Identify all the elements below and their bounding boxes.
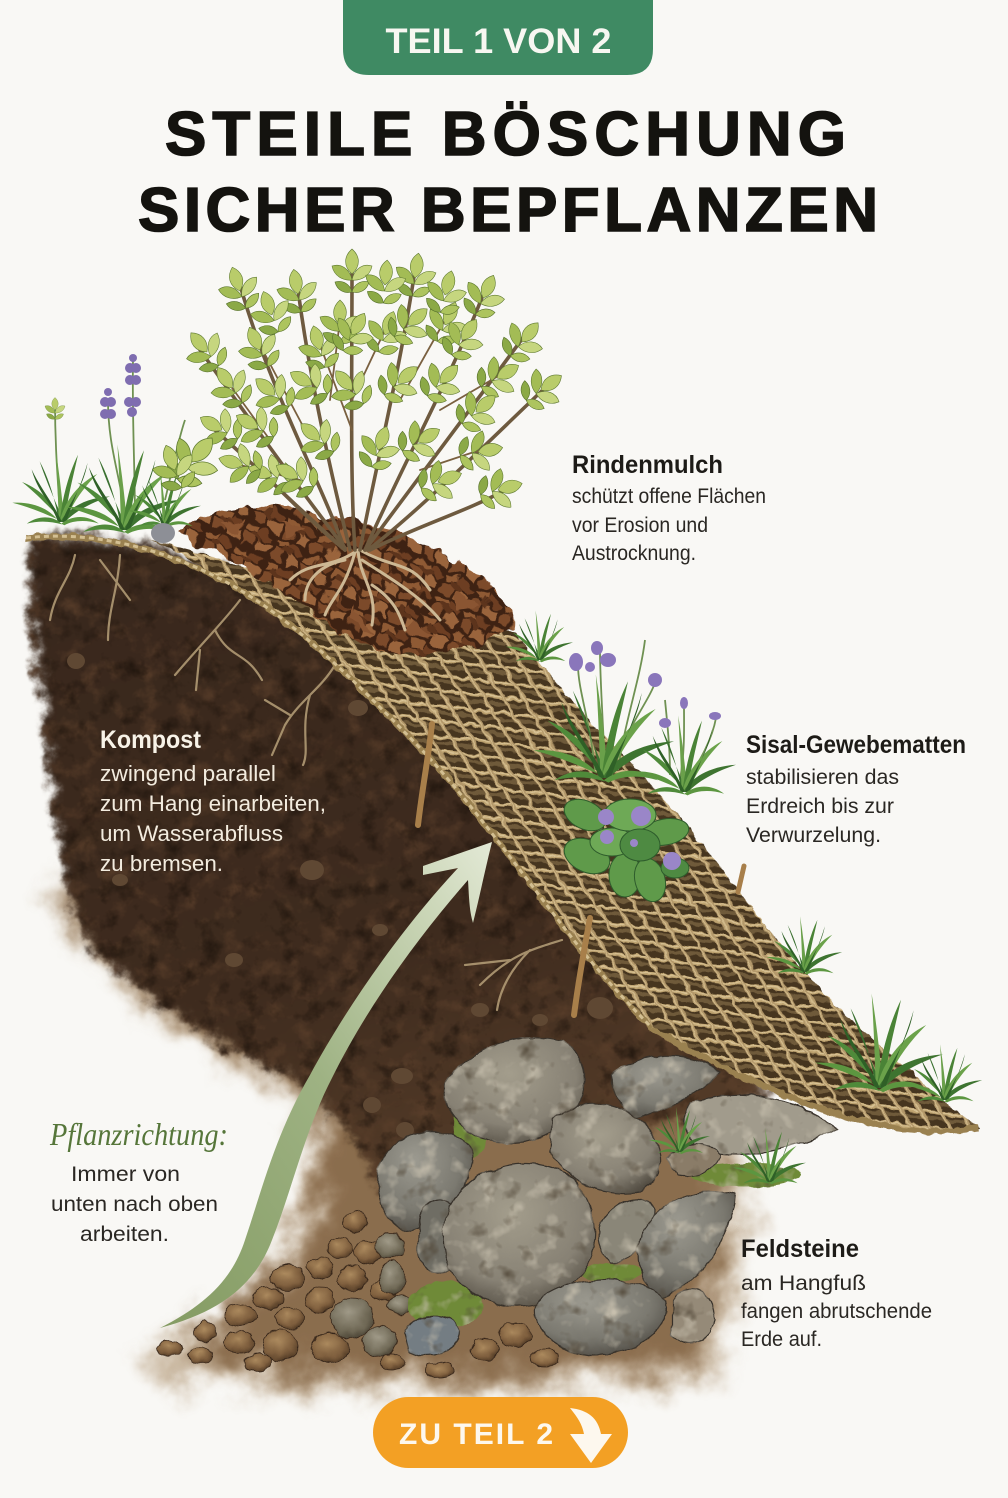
label: Kompost: zwingend parallel	[100, 761, 276, 786]
button: next part	[373, 1397, 628, 1468]
lower tufts	[649, 916, 982, 1184]
title	[138, 100, 878, 245]
small stone	[151, 523, 175, 543]
right plants on mat	[506, 610, 982, 1184]
button: next part: ZU TEIL 2	[399, 1418, 553, 1451]
label: Rindenmulch: schützt offene Flächen	[572, 485, 766, 508]
part tab	[343, 0, 653, 75]
label: Pflanzrichtung	[49, 1116, 228, 1246]
label: Kompost: zum Hang einarbeiten,	[100, 791, 326, 816]
label: Feldsteine	[741, 1235, 932, 1351]
shrub leaves	[176, 249, 573, 514]
moss	[407, 1093, 800, 1329]
soil pale fade	[50, 880, 750, 1392]
soil tan fade	[62, 890, 725, 1374]
soil pebbles	[67, 653, 613, 1138]
field stones	[378, 1038, 838, 1356]
label: Feldsteine: fangen abrutschende	[741, 1300, 932, 1323]
label: Sisal-Gewebematten: Verwurzelung.	[746, 824, 881, 847]
left plants: grass and lavender	[12, 354, 231, 543]
title: STEILE BÖSCHUNG	[165, 100, 846, 169]
label: Pflanzrichtung: Immer von	[71, 1163, 180, 1186]
label: Rindenmulch	[572, 451, 766, 565]
icon: curved down arrow	[570, 1408, 612, 1463]
label: Rindenmulch: Rindenmulch	[572, 451, 723, 479]
stakes	[418, 724, 744, 1015]
label: Pflanzrichtung: arbeiten.	[80, 1223, 169, 1246]
label: Pflanzrichtung: Pflanzrichtung:	[49, 1116, 228, 1152]
left leaf cluster	[45, 398, 231, 496]
label: Sisal-Gewebematten: Erdreich bis zur	[746, 795, 894, 818]
label: Kompost: um Wasserabfluss	[100, 821, 283, 846]
soil body	[28, 537, 770, 1215]
label: Pflanzrichtung: unten nach oben	[51, 1193, 218, 1216]
shrub branches	[200, 270, 548, 550]
label: Sisal-Gewebematten: stabilisieren das	[746, 766, 899, 789]
label: Feldsteine: am Hangfuß	[741, 1272, 866, 1295]
title: SICHER BEPFLANZEN	[138, 176, 878, 245]
label: Feldsteine: Feldsteine	[741, 1235, 859, 1263]
part tab: TEIL 1 VON 2	[386, 22, 612, 61]
lavender	[100, 354, 141, 419]
gravel	[158, 1211, 559, 1378]
label: Rindenmulch: Austrocknung.	[572, 542, 696, 565]
shrub	[176, 249, 573, 630]
soil cross-section	[28, 537, 770, 1392]
shrub roots	[290, 550, 440, 630]
planting direction arrow	[160, 842, 492, 1328]
violet plant	[558, 793, 691, 905]
label: Feldsteine: Erde auf.	[741, 1328, 822, 1351]
roots	[50, 555, 562, 1010]
label: Kompost: Kompost	[100, 726, 202, 754]
label: Sisal-Gewebematten: Sisal-Gewebematten	[746, 731, 966, 759]
sisal mat	[26, 536, 980, 1131]
label: Sisal-Gewebematten	[746, 731, 966, 847]
label: Kompost	[100, 726, 326, 876]
mat rope edge	[26, 536, 978, 1131]
rindenmulch mound	[175, 506, 515, 655]
label: Rindenmulch: vor Erosion und	[572, 514, 708, 537]
label: Kompost: zu bremsen.	[100, 851, 223, 876]
mat surface	[150, 540, 980, 1131]
blooming tuft	[506, 610, 736, 795]
